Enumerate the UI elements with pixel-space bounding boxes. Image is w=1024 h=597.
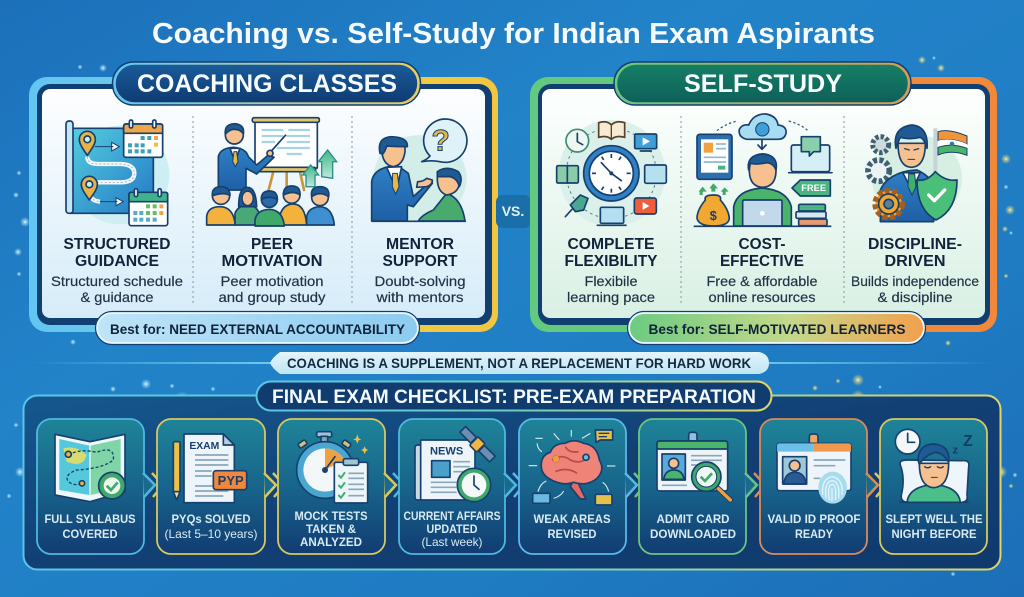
icon: id card with fingerprint: [777, 434, 851, 504]
feature: peer motivation: and group study: [218, 289, 326, 305]
step label: [404, 509, 500, 549]
feature: discipline-driven: [851, 236, 979, 305]
feature: complete flexibility: Flexibile: [584, 273, 638, 289]
step: full syllabus covered: [37, 419, 144, 554]
feature: discipline-driven: & discipline: [878, 289, 953, 305]
step: current affairs: [399, 419, 505, 554]
icon: free online resources: FREE: [801, 183, 826, 193]
step label: READY: [795, 527, 833, 541]
panel: final exam checklist: [24, 382, 1000, 570]
arrow: step 2 to 3: [264, 473, 284, 497]
arrow: step 4 to 5: [504, 473, 524, 497]
heading: self-study: SELF-STUDY: [684, 70, 842, 98]
vs badge: VS.: [502, 203, 524, 219]
feature: cost-effective: Free & affordable: [706, 273, 818, 289]
feature: structured guidance: & guidance: [80, 289, 154, 305]
feature: cost-effective: [706, 236, 818, 305]
step label: MOCK TESTS: [294, 509, 368, 523]
arrow: step 6 to 7: [745, 473, 765, 497]
feature: cost-effective: online resources: [708, 289, 816, 305]
icon: sleeping student with clock: [895, 429, 973, 502]
icon: free online resources: [694, 114, 832, 226]
arrow: step 1 to 2: [143, 473, 163, 497]
best for callout: coaching: Best for: NEED EXTERNAL ACCOUNTABILITY: [110, 321, 406, 337]
icon: stopwatch and checklist clipboard: [297, 432, 368, 503]
step label: CURRENT AFFAIRS: [404, 509, 500, 523]
best for callout: coaching: [96, 312, 420, 344]
step: weak areas revised: [519, 419, 626, 554]
step label: [164, 512, 258, 541]
feature: mentor support: [374, 236, 466, 305]
heading: coaching classes: [112, 62, 420, 105]
feature: complete flexibility: [564, 236, 658, 305]
icon: brain with notes: [529, 430, 615, 505]
panel: self-study: [530, 62, 997, 344]
feature: discipline-driven: Builds independence: [851, 273, 979, 289]
panel frame: [530, 77, 997, 332]
step label: VALID ID PROOF: [768, 512, 860, 526]
icon: teacher presenting to peer group: [207, 118, 337, 226]
step: mock tests: [278, 419, 385, 554]
panel frame: [29, 77, 498, 332]
step label: ADMIT CARD: [656, 512, 730, 526]
step label: [768, 512, 860, 541]
step label: REVISED: [548, 527, 597, 541]
feature: mentor support: with mentors: [375, 289, 464, 305]
icon: sleeping student with clock: Z: [963, 433, 973, 450]
step label: PYQs SOLVED: [172, 512, 251, 526]
icon: free online resources: $: [710, 209, 717, 223]
icon: exam paper with PYP tag: EXAM: [189, 441, 219, 452]
step label: [44, 512, 136, 541]
step label: [534, 512, 610, 541]
step: admit card downloaded: [639, 419, 746, 554]
checklist heading: [256, 382, 772, 410]
arrow: step 7 to 8: [866, 473, 886, 497]
step: valid id proof: [760, 419, 867, 554]
supplement banner: [30, 352, 994, 374]
step label: [650, 512, 736, 541]
feature: discipline-driven: DRIVEN: [884, 253, 946, 270]
title: Coaching vs. Self-Study for Indian Exam Aspirants: [152, 18, 875, 50]
checklist frame: [24, 396, 1000, 570]
vs badge: [496, 195, 531, 228]
feature: mentor support: Doubt-solving: [374, 273, 466, 289]
column dividers: [193, 116, 352, 303]
icon: mentor support conversation: [372, 119, 467, 222]
feature: structured guidance: [51, 236, 183, 305]
feature: peer motivation: MOTIVATION: [222, 253, 322, 270]
feature: peer motivation: [218, 236, 326, 305]
feature: cost-effective: COST-: [738, 236, 786, 253]
feature: structured guidance: Structured schedule: [51, 273, 183, 289]
heading: self-study: [614, 62, 911, 105]
icon: mentor support conversation: ?: [431, 125, 450, 158]
feature: mentor support: SUPPORT: [382, 253, 458, 270]
feature: peer motivation: Peer motivation: [220, 273, 324, 289]
step label: NIGHT BEFORE: [892, 527, 976, 541]
arrow: step 3 to 4: [384, 473, 404, 497]
step label: DOWNLOADED: [650, 527, 736, 541]
feature: complete flexibility: COMPLETE: [568, 236, 655, 253]
feature: peer motivation: PEER: [251, 236, 293, 253]
arrow: step 5 to 6: [625, 473, 645, 497]
icon: roadmap and calendars: [66, 120, 169, 226]
step: pyqs solved: [157, 419, 265, 554]
column dividers: [681, 116, 844, 303]
feature: complete flexibility: learning pace: [567, 289, 655, 305]
heading: coaching classes: COACHING CLASSES: [137, 70, 397, 98]
step label: COVERED: [62, 527, 118, 541]
step label: SLEPT WELL THE: [886, 512, 982, 526]
icon: admit card with magnifier: [657, 432, 730, 500]
step label: FULL SYLLABUS: [44, 512, 136, 526]
step: slept well: [880, 419, 987, 554]
icon: sleeping student with clock: z: [953, 444, 958, 456]
feature: complete flexibility: FLEXIBILITY: [564, 253, 658, 270]
step label: WEAK AREAS: [534, 512, 610, 526]
icon: disciplined student with flag and shield: [868, 125, 967, 222]
step label: UPDATED: [426, 522, 478, 536]
checklist heading: FINAL EXAM CHECKLIST: PRE-EXAM PREPARATION: [272, 387, 756, 408]
feature: discipline-driven: DISCIPLINE-: [868, 236, 962, 253]
step label: [294, 509, 368, 549]
feature: mentor support: MENTOR: [386, 236, 454, 253]
step label: [886, 512, 982, 541]
icon: syllabus map with check: [55, 434, 125, 502]
step label: ANALYZED: [300, 535, 362, 549]
icon: exam paper with PYP tag: [173, 434, 247, 503]
feature: structured guidance: STRUCTURED: [64, 236, 170, 253]
panel: coaching classes: [29, 62, 498, 344]
supplement banner: COACHING IS A SUPPLEMENT, NOT A REPLACEMENT FOR HARD WORK: [287, 355, 751, 371]
feature: cost-effective: EFFECTIVE: [720, 253, 804, 270]
icon: newspaper, satellite and clock: NEWS: [430, 445, 463, 457]
best for callout: self-study: Best for: SELF-MOTIVATED LEARNERS: [648, 321, 906, 337]
step label: TAKEN &: [306, 522, 356, 536]
feature: structured guidance: GUIDANCE: [75, 253, 159, 270]
icon: exam paper with PYP tag: PYP: [218, 474, 244, 488]
step label: (Last 5–10 years): [164, 527, 258, 541]
icon: clock with flexible learning devices: [557, 120, 666, 227]
best for callout: self-study: [628, 312, 926, 344]
step label: (Last week): [422, 535, 482, 549]
